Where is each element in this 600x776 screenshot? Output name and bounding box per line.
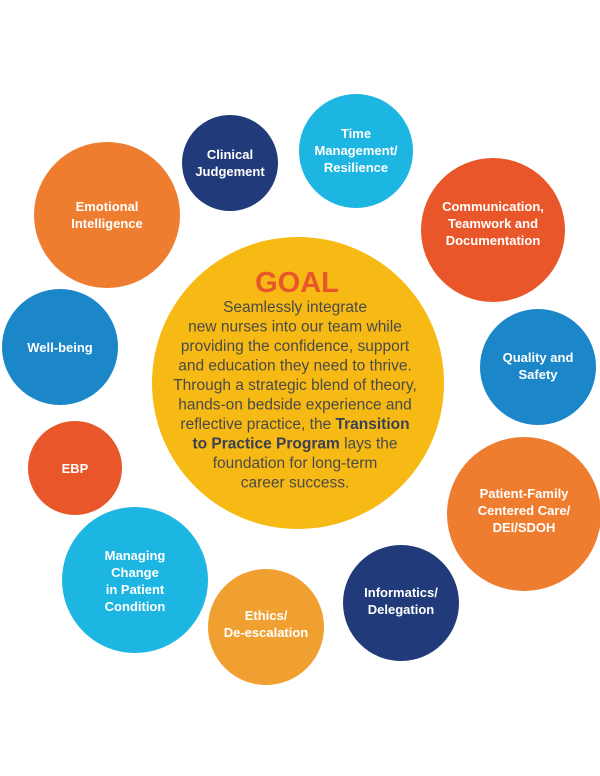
goal text: to Practice Program lays the: [192, 436, 398, 452]
circle: emotional intelligence: Emotional: [76, 199, 138, 214]
circle: informatics: [343, 545, 459, 661]
circle: time management: [299, 94, 413, 208]
circle: patient-family centered care: [447, 437, 600, 591]
circle: ethics: De-escalation: [224, 625, 308, 640]
goal text: reflective practice, the Transition: [180, 416, 410, 433]
circle: communication: Teamwork and: [448, 216, 538, 231]
circle: managing change: Condition: [105, 599, 165, 614]
goal text: hands-on bedside experience and: [178, 396, 412, 414]
circle: well-being: Well-being: [27, 340, 93, 355]
circle: managing change: in Patient: [106, 582, 165, 597]
circle: patient-family centered care: Patient-Family: [480, 486, 569, 501]
circle: quality and safety: [480, 309, 596, 425]
circle: time management: Resilience: [324, 160, 388, 175]
circle: managing change: [62, 507, 208, 653]
circle: ethics: [208, 569, 324, 685]
goal text: career success.: [241, 474, 349, 492]
circle: clinical judgement: Clinical: [207, 147, 253, 162]
circle: communication: [421, 158, 565, 302]
goal text: Through a strategic blend of theory,: [173, 377, 417, 394]
circle: clinical judgement: [182, 115, 278, 211]
goal text: and education they need to thrive.: [178, 358, 412, 374]
circle: informatics: Informatics/: [364, 585, 438, 600]
circle: quality and safety: Quality and: [503, 350, 573, 365]
circle: quality and safety: Safety: [518, 367, 558, 382]
circle: emotional intelligence: [34, 142, 180, 288]
central goal circle: [152, 237, 444, 529]
circle: EBP: [28, 421, 122, 515]
circle: patient-family centered care: DEI/SDOH: [493, 520, 555, 535]
circle: clinical judgement: Judgement: [195, 164, 265, 179]
circle: communication: Communication,: [442, 199, 544, 214]
circle: managing change: Managing: [105, 548, 165, 563]
goal heading: GOAL: [255, 267, 339, 299]
circle: ethics: Ethics/: [245, 608, 288, 623]
goal text: Seamlessly integrate: [223, 299, 367, 316]
goal text: foundation for long-term: [213, 455, 377, 472]
goal text: new nurses into our team while: [188, 318, 402, 336]
circle: emotional intelligence: Intelligence: [71, 216, 143, 231]
goal text: providing the confidence, support: [181, 338, 410, 355]
circle: managing change: Change: [111, 565, 159, 580]
circle: EBP: EBP: [62, 461, 89, 476]
circle: informatics: Delegation: [368, 602, 434, 617]
circle: patient-family centered care: Centered Care/: [478, 503, 571, 518]
circle: well-being: [2, 289, 118, 405]
circle: communication: Documentation: [446, 233, 540, 248]
circle: time management: Management/: [314, 143, 398, 158]
circle: time management: Time: [341, 126, 371, 141]
